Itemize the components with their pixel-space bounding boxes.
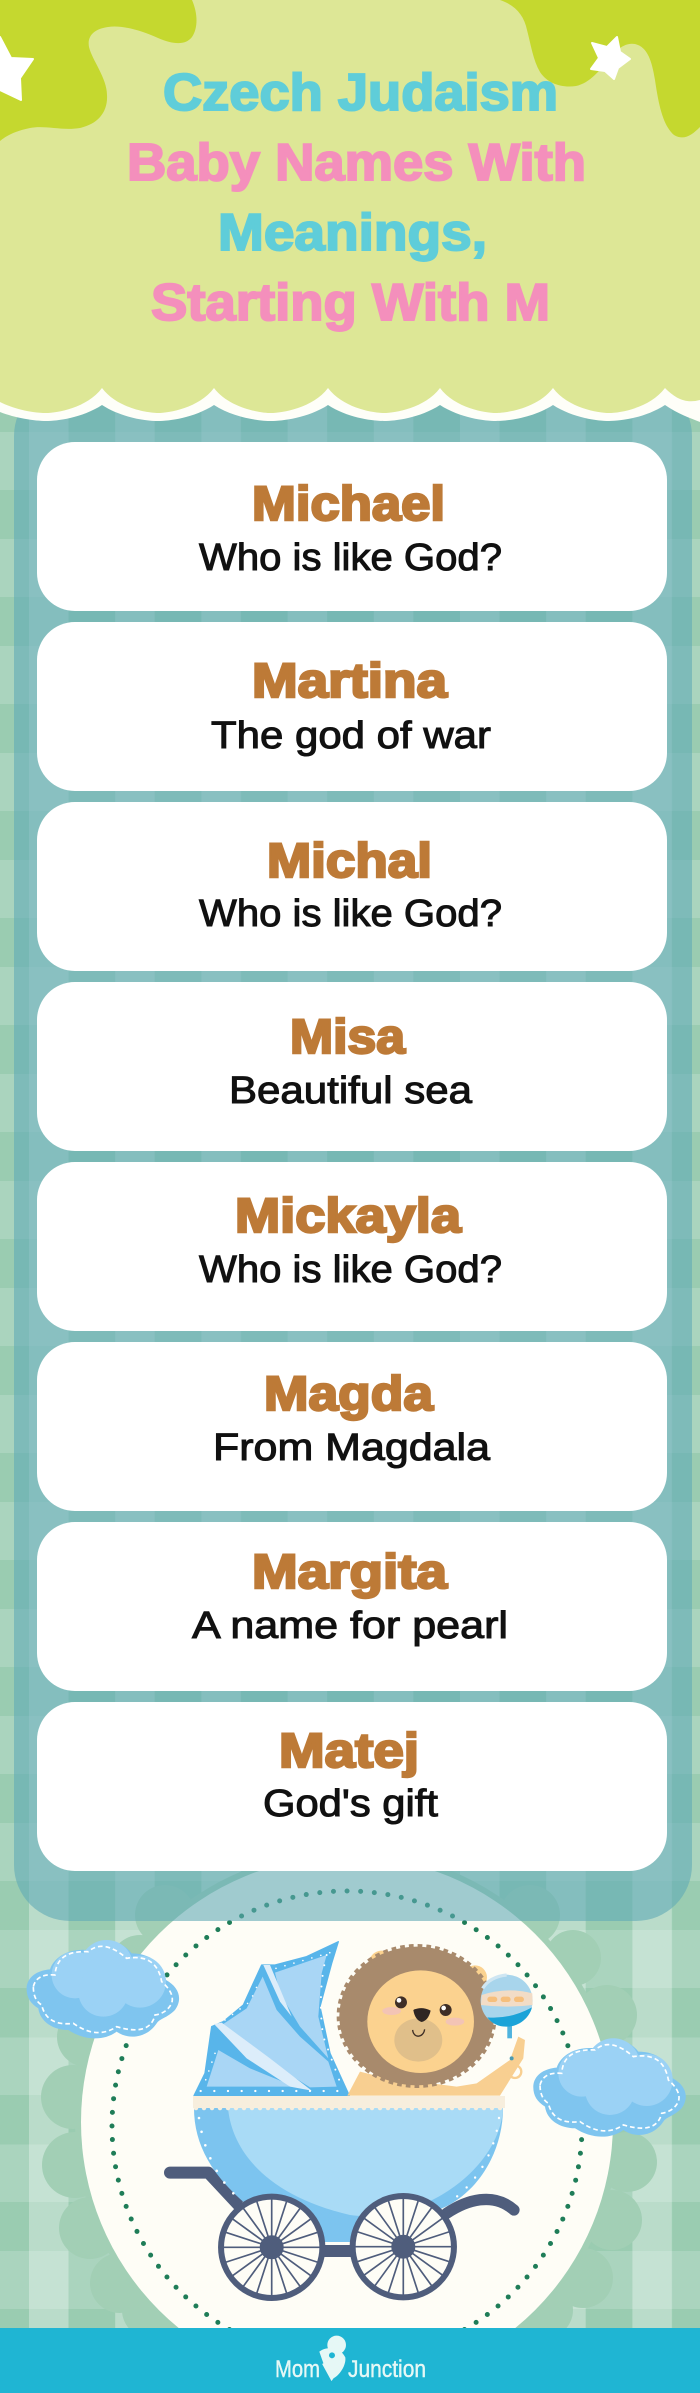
decorative blob: top left xyxy=(0,0,196,141)
card: Misa: Beautiful sea xyxy=(229,1070,473,1112)
card: Michael: Michael xyxy=(252,478,445,531)
card: Michal: Michal xyxy=(267,835,432,888)
panel: teal translucent backing xyxy=(14,380,692,1921)
stroller canopy xyxy=(194,1942,349,2096)
card: Magda: Magda xyxy=(264,1368,433,1421)
header background xyxy=(0,0,700,422)
card: Matej xyxy=(37,1702,667,1871)
card: Mickayla xyxy=(37,1162,667,1331)
card: Martina xyxy=(37,622,667,791)
stroller handles and axle xyxy=(170,2173,514,2213)
stroller axle xyxy=(320,2245,356,2257)
card: Magda xyxy=(37,1342,667,1511)
card: Margita xyxy=(37,1522,667,1691)
card: Martina: Martina xyxy=(252,655,447,708)
illustration: stroller with lion xyxy=(170,1942,533,2298)
card: Misa: Misa xyxy=(290,1011,405,1064)
card: Matej: God's gift xyxy=(263,1783,438,1825)
wheel right xyxy=(353,2196,454,2297)
icon: star left xyxy=(0,37,33,100)
icon: star right xyxy=(591,37,630,79)
logo text: Mom xyxy=(275,2356,320,2383)
card: Mickayla: Mickayla xyxy=(235,1190,461,1243)
rattle xyxy=(481,1975,533,2038)
icon: mother and baby xyxy=(319,2336,346,2379)
icon: cloud right xyxy=(533,2038,686,2137)
card: Margita: A name for pearl xyxy=(192,1605,508,1647)
title: Baby Names With xyxy=(127,134,586,192)
card: Mickayla: Who is like God? xyxy=(199,1249,502,1291)
card: Margita: Margita xyxy=(252,1546,447,1599)
title: Czech Judaism xyxy=(163,64,558,122)
title xyxy=(127,64,586,332)
dotted circle xyxy=(112,1891,582,2361)
logo text: Junction xyxy=(348,2356,426,2383)
logo: MomJunction xyxy=(275,2336,426,2383)
panel: name cards xyxy=(37,442,667,1871)
card: Misa xyxy=(37,982,667,1151)
decorative blob: top right xyxy=(500,0,700,137)
logo text xyxy=(275,2356,426,2383)
icon: cloud left xyxy=(27,1940,179,2038)
lion xyxy=(339,1947,525,2096)
wheel left xyxy=(221,2197,322,2298)
stroller basket xyxy=(193,2096,505,2242)
card: Michael: Who is like God? xyxy=(199,537,502,579)
title: Starting With M xyxy=(151,274,550,332)
card: Michal xyxy=(37,802,667,971)
card: Magda: From Magdala xyxy=(213,1427,491,1469)
scalloped green blob behind circle xyxy=(41,1850,657,2393)
card: Michael xyxy=(37,442,667,611)
card: Michal: Who is like God? xyxy=(199,893,502,935)
card: Martina: The god of war xyxy=(211,715,491,757)
cream circle xyxy=(81,1856,613,2388)
title: Meanings, xyxy=(218,204,487,262)
card: Matej: Matej xyxy=(279,1725,419,1778)
footer bar xyxy=(0,2328,700,2393)
